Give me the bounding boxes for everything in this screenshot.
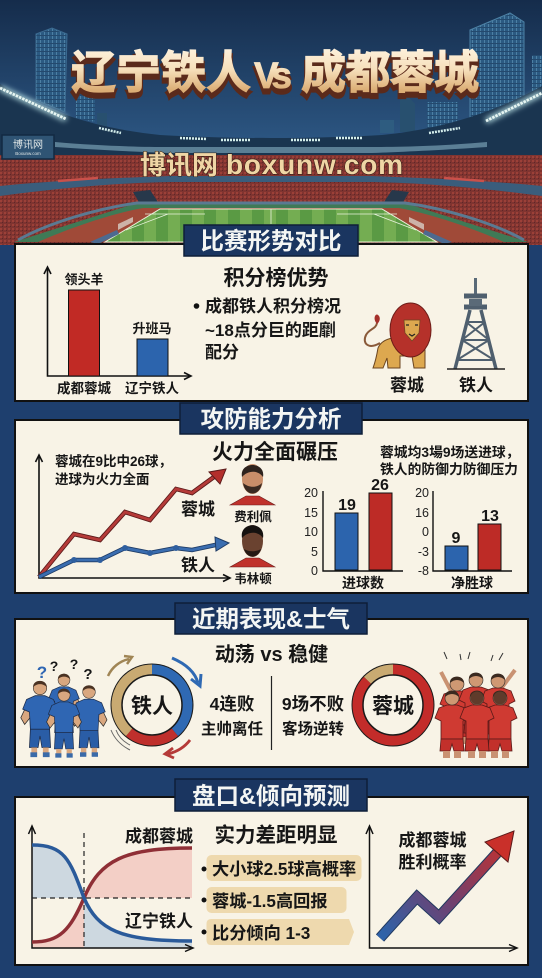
heading: 盘口&倾向预测: 盘口&倾向预测 bbox=[192, 783, 350, 809]
line chart: attack trend bbox=[36, 453, 230, 582]
text: 蓉城 form: 9场不败 bbox=[282, 694, 345, 714]
bar chart: standings: 辽宁铁人 bbox=[125, 380, 179, 396]
heading: 积分榜优势: 积分榜优势 bbox=[224, 267, 328, 290]
bar chart: standings bbox=[44, 267, 191, 396]
heading: 盘口&倾向预测 bbox=[175, 779, 367, 811]
chart: probability crossover: 辽宁铁人 bbox=[125, 911, 193, 931]
bar chart: 净胜球: -3 bbox=[418, 545, 429, 559]
heading: 比赛形势对比: 比赛形势对比 bbox=[200, 227, 342, 254]
label: 蓉城: 蓉城 bbox=[390, 375, 424, 395]
list item: 大小球 bbox=[202, 855, 362, 881]
sign: 博讯网: 博讯网 bbox=[13, 138, 43, 151]
title: 辽宁铁人 vs 成都蓉城: 成都蓉城 bbox=[301, 47, 479, 98]
chart: win probability arrow: 成都蓉城 bbox=[398, 830, 466, 850]
bar chart: 净胜球: 9 bbox=[452, 530, 461, 547]
list item: 蓉城-1.5 bbox=[202, 887, 346, 913]
sign: 博讯网 bbox=[2, 135, 54, 159]
bullet text: 成都铁人积分榜况 bbox=[205, 296, 341, 316]
text: 蓉城 form bbox=[282, 694, 345, 738]
illustration: confused blue players bbox=[21, 656, 107, 758]
bar chart: 进球数: 进球数 bbox=[342, 575, 384, 591]
bar chart: 净胜球: 13 bbox=[481, 508, 499, 525]
list item: 大小球: 大小球2.5球高概率 bbox=[212, 859, 356, 879]
illustration: confused blue players: ? bbox=[37, 663, 47, 682]
stadium header illustration bbox=[0, 0, 542, 245]
bar chart: 进球数: 26 bbox=[371, 477, 389, 494]
text: 铁人 form: 主帅离任 bbox=[201, 719, 263, 738]
title: 辽宁铁人 vs 成都蓉城: Vs bbox=[254, 60, 292, 101]
panel: 近期表现&士气 bbox=[15, 619, 528, 767]
bar chart: standings: 成都蓉城 bbox=[57, 380, 111, 396]
bar chart: 净胜球: 0 bbox=[422, 525, 429, 539]
heading: 近期表现&士气 bbox=[175, 603, 367, 634]
heading: 火力全面碾压: 火力全面碾压 bbox=[212, 440, 338, 464]
panel: 盘口&倾向预测 bbox=[15, 797, 528, 965]
bar chart: 进球数: 20 bbox=[304, 486, 318, 500]
illustration: celebrating red players bbox=[435, 652, 517, 758]
arrow: blue bbox=[172, 658, 201, 686]
icon: lion bbox=[365, 303, 431, 368]
title: 辽宁铁人 vs 成都蓉城: 辽宁铁人 bbox=[71, 52, 251, 103]
portrait: 费利佩: 费利佩 bbox=[234, 509, 272, 524]
sign: 博讯网: Boxunw.com bbox=[15, 151, 41, 156]
list item: 比分倾向 bbox=[202, 919, 354, 945]
bar chart: 净胜球: 16 bbox=[415, 506, 429, 520]
city skyline bbox=[36, 13, 542, 133]
heading: 攻防能力分析 bbox=[180, 403, 362, 434]
title: 辽宁铁人 vs 成都蓉城: Vs bbox=[254, 55, 292, 96]
portrait: 韦林顿: 韦林顿 bbox=[234, 571, 272, 586]
arrow: red bbox=[165, 740, 190, 758]
illustration: confused blue players: ? bbox=[50, 658, 58, 674]
donut: 蓉城: 蓉城 bbox=[372, 695, 414, 718]
title: 辽宁铁人 vs 成都蓉城: 成都蓉城 bbox=[301, 52, 479, 103]
bar chart: 进球数: 10 bbox=[304, 525, 318, 539]
bar chart: 进球数: 15 bbox=[304, 506, 318, 520]
heading: 实力差距明显: 实力差距明显 bbox=[214, 823, 338, 847]
watermark: 博讯网 boxunw.com bbox=[140, 149, 403, 180]
panel: 比赛形势对比 bbox=[15, 244, 528, 401]
divider bbox=[270, 676, 272, 750]
decorative arcs bbox=[111, 730, 130, 750]
heading: 攻防能力分析: 攻防能力分析 bbox=[200, 406, 342, 432]
illustration: confused blue players: ? bbox=[70, 656, 78, 672]
bar chart: 进球数: 0 bbox=[311, 564, 318, 578]
line chart: attack trend: 蓉城在9比中26球， bbox=[55, 453, 172, 469]
portrait: 费利佩 bbox=[230, 464, 275, 524]
chart: win probability arrow: 胜利概率 bbox=[398, 852, 466, 872]
panel: 攻防能力分析 bbox=[15, 420, 528, 593]
donut: 蓉城 bbox=[352, 664, 434, 746]
donut: 铁人 bbox=[110, 664, 194, 746]
bar chart: 净胜球: -8 bbox=[418, 564, 429, 578]
curb and green verge bbox=[14, 203, 528, 242]
text: 铁人 form: 4连败 bbox=[210, 694, 255, 714]
callout: defence note bbox=[380, 444, 520, 477]
list item: 蓉城-1.5: 蓉城-1.5高回报 bbox=[212, 891, 328, 911]
track bbox=[38, 208, 504, 242]
text: 铁人 form bbox=[201, 694, 263, 738]
illustration: confused blue players: ? bbox=[83, 666, 93, 683]
chart: win probability arrow bbox=[366, 826, 517, 952]
line chart: attack trend: 铁人 bbox=[181, 556, 215, 575]
tunnels bbox=[133, 190, 158, 204]
arrow: tan bbox=[108, 656, 132, 676]
bar chart: 净胜球 bbox=[415, 486, 512, 591]
bullet text: 配分 bbox=[205, 343, 239, 362]
bullet text bbox=[194, 296, 341, 362]
heading: 比赛形势对比 bbox=[184, 225, 358, 256]
portrait: 韦林顿 bbox=[230, 525, 275, 586]
bullet text: ~18点分巨的距劘 bbox=[205, 321, 336, 340]
bar chart: 净胜球: 20 bbox=[415, 486, 429, 500]
icon: iron tower bbox=[447, 278, 505, 369]
chart: probability crossover bbox=[28, 826, 193, 952]
bar chart: 净胜球: 净胜球 bbox=[451, 575, 493, 591]
bar chart: 进球数 bbox=[304, 477, 403, 591]
pitch bbox=[105, 209, 437, 242]
heading: 近期表现&士气: 近期表现&士气 bbox=[192, 606, 350, 632]
callout: defence note: 铁人的防御力防御压力 bbox=[380, 461, 518, 477]
text: 蓉城 form: 客场逆转 bbox=[282, 719, 344, 738]
label: 铁人: 铁人 bbox=[459, 376, 493, 395]
line chart: attack trend: 蓉城 bbox=[181, 499, 215, 519]
line chart: attack trend: 进球为火力全面 bbox=[55, 471, 150, 487]
donut: 铁人: 铁人 bbox=[131, 695, 173, 718]
chart: probability crossover: 成都蓉城 bbox=[125, 826, 193, 846]
list item: 比分倾向: 比分倾向 1-3 bbox=[212, 923, 310, 943]
bar chart: standings: 升班马 bbox=[132, 321, 172, 336]
watermark: 博讯网 boxunw.com: 博讯网 bbox=[140, 150, 218, 180]
watermark: 博讯网 boxunw.com: boxunw.com bbox=[226, 149, 403, 180]
bar chart: standings: 领头羊 bbox=[64, 272, 104, 287]
title: 辽宁铁人 vs 成都蓉城: 辽宁铁人 bbox=[71, 47, 251, 98]
bar chart: 进球数: 5 bbox=[311, 545, 318, 559]
bar chart: 进球数: 19 bbox=[338, 497, 356, 514]
floodlights bbox=[0, 88, 542, 140]
heading: 动荡 vs 稳健: 动荡 vs 稳健 bbox=[215, 643, 328, 666]
callout: defence note: 蓉城均3場9场送进球， bbox=[380, 444, 520, 460]
title: 辽宁铁人 vs 成都蓉城 bbox=[71, 47, 479, 103]
